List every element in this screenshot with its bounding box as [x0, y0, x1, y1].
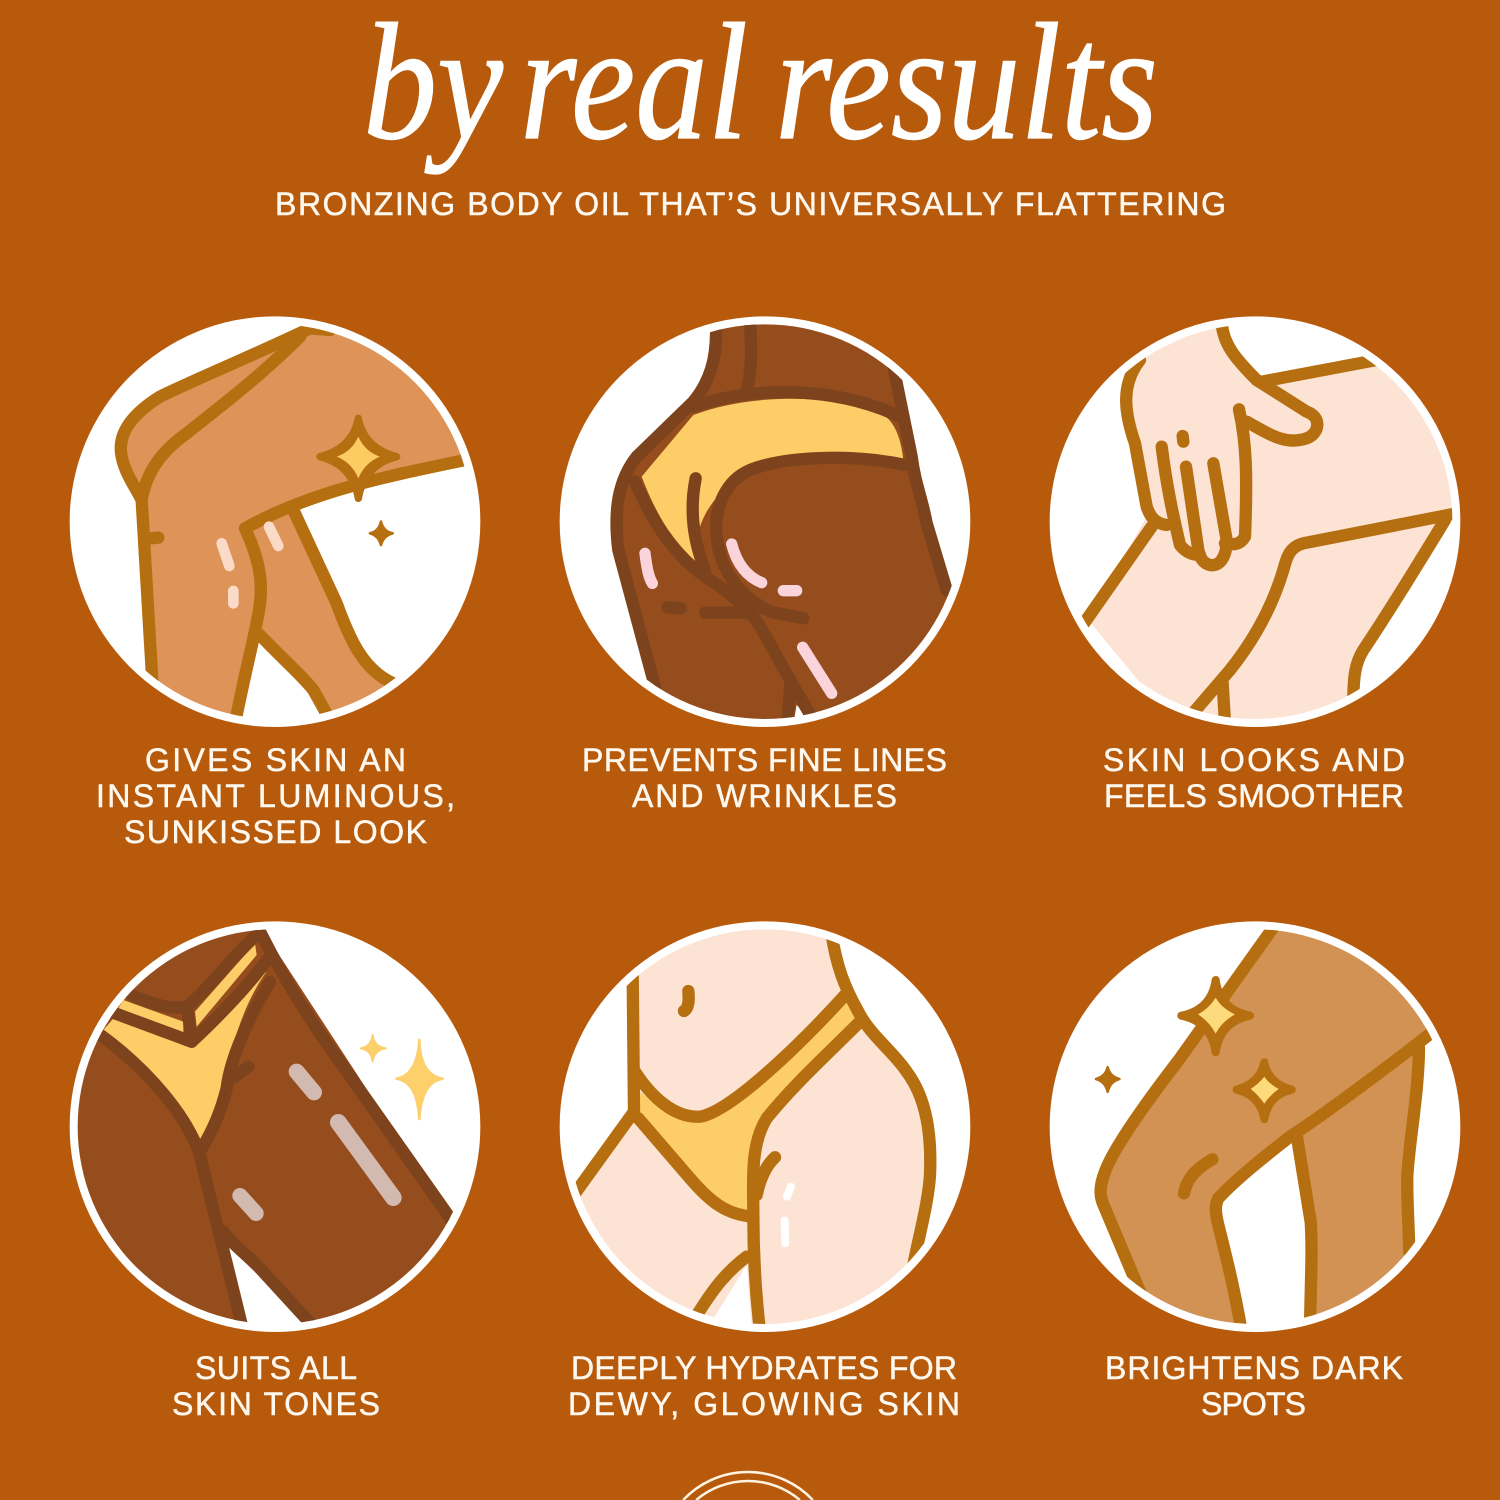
label: GIVES SKIN AN: [145, 742, 406, 778]
label: [1105, 1350, 1403, 1422]
label: BRIGHTENS DARK: [1105, 1350, 1403, 1386]
icon: hip in yellow briefs, front view: [560, 921, 970, 1348]
label: DEEPLY HYDRATES FOR: [571, 1350, 957, 1386]
panel: fine lines: [560, 316, 983, 814]
label: [568, 1350, 960, 1422]
label: SUITS ALL: [195, 1350, 357, 1386]
label: [172, 1350, 380, 1422]
label: [1103, 742, 1405, 814]
icon: hand on thigh: [1050, 316, 1460, 727]
icon: hips in yellow briefs, rear view: [560, 316, 983, 743]
icon: logo badge arcs: [683, 1472, 813, 1500]
title: [363, 0, 1158, 175]
icon: deep-toned hip with sparkles: [70, 921, 480, 1332]
label: SPOTS: [1201, 1386, 1306, 1422]
label: SKIN LOOKS AND: [1103, 742, 1405, 778]
label: AND WRINKLES: [632, 778, 897, 814]
label: [96, 742, 455, 850]
panel: smoother skin: [1050, 316, 1500, 814]
icon: knee with sparkles: [70, 316, 493, 743]
icon: leg with sparkles: [1050, 921, 1473, 1348]
panel: deep hydration: [560, 921, 970, 1422]
label: FEELS SMOOTHER: [1104, 778, 1404, 814]
panel: dark spots: [1050, 921, 1473, 1422]
label: SKIN TONES: [172, 1386, 380, 1422]
panel: luminous look: [70, 316, 493, 850]
label: DEWY, GLOWING SKIN: [568, 1386, 960, 1422]
panel: all skin tones: [60, 915, 493, 1422]
label: [582, 742, 947, 814]
label: INSTANT LUMINOUS,: [96, 778, 455, 814]
label: PREVENTS FINE LINES: [582, 742, 947, 778]
subtitle: BRONZING BODY OIL THAT’S UNIVERSALLY FLATTERING: [275, 186, 1226, 222]
label: SUNKISSED LOOK: [124, 814, 427, 850]
